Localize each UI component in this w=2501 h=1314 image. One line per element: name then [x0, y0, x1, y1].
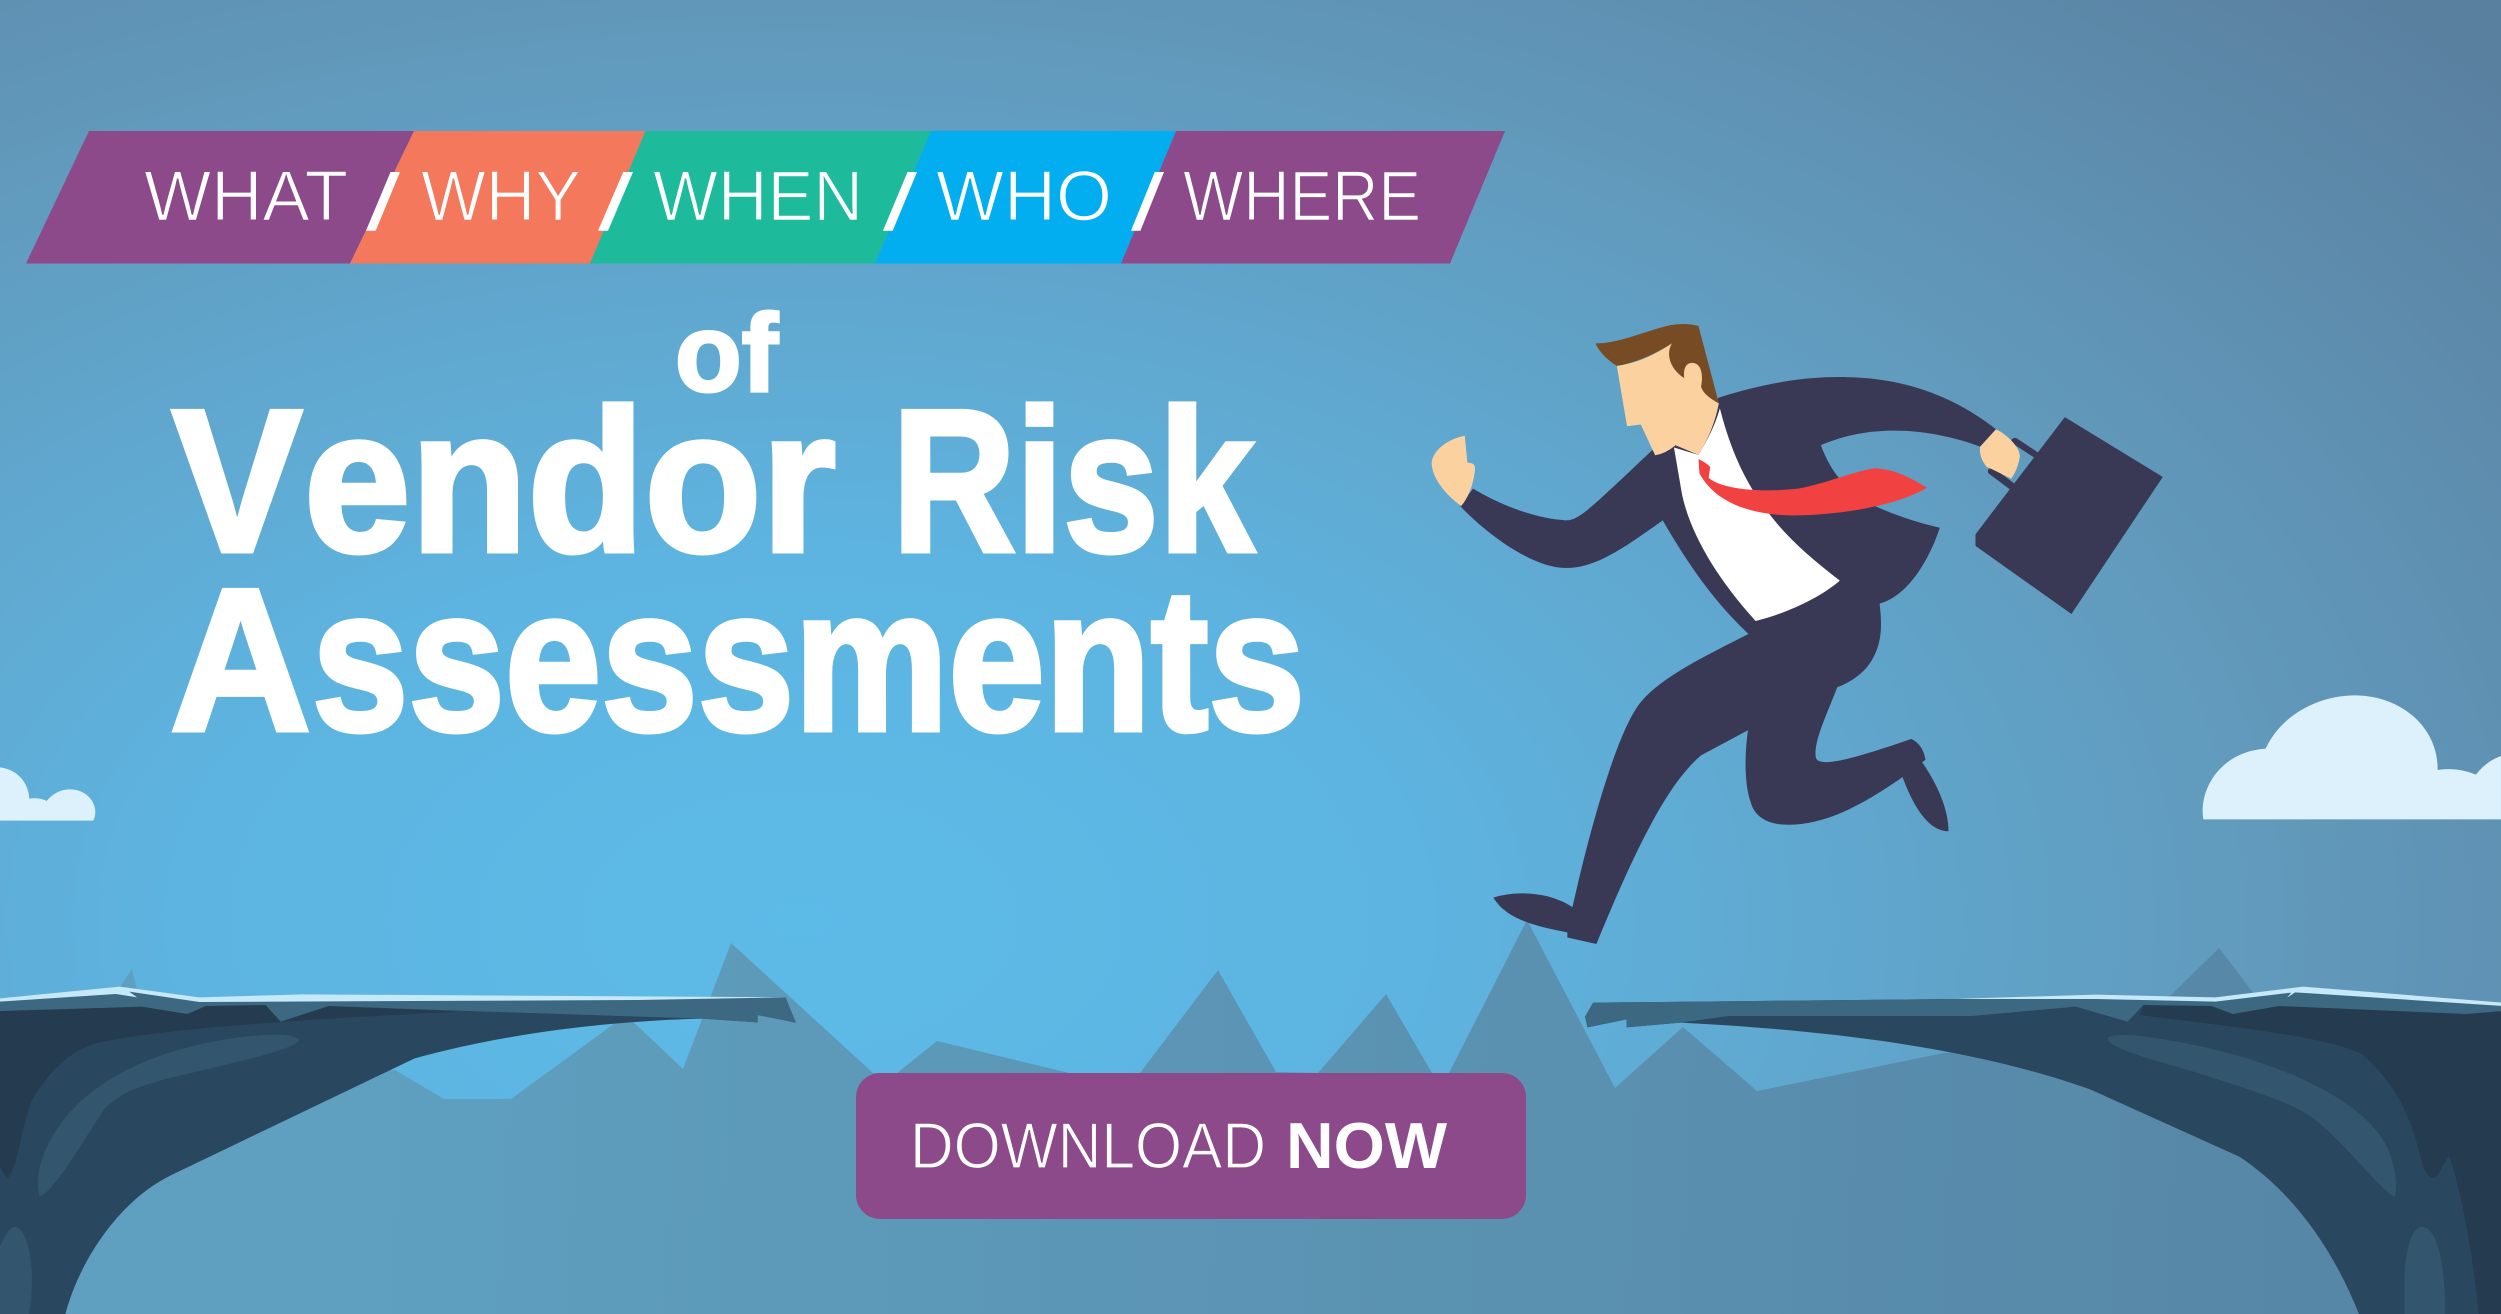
title line: assessments: ssessments	[312, 547, 1305, 774]
word: why: WHY	[421, 158, 581, 236]
slash 1: /	[366, 158, 401, 247]
band: what	[26, 131, 414, 264]
title line: vendor risk: V	[172, 368, 302, 595]
rock streak	[38, 1035, 299, 1197]
button: download now	[856, 1073, 1526, 1219]
dark shadow region	[0, 1005, 459, 1178]
cliff ledge	[0, 987, 796, 1023]
cliff ledge	[1585, 987, 2501, 1027]
slash 4: /	[1131, 158, 1165, 247]
title line: vendor risk: endor	[304, 368, 836, 595]
cliff body	[1585, 987, 2501, 1314]
band: where	[1121, 131, 1505, 264]
mountains	[0, 920, 2501, 1314]
band: why	[350, 131, 646, 264]
briefcase	[1976, 417, 2163, 614]
title	[170, 292, 1305, 774]
word: who: WHO	[936, 158, 1112, 236]
suit	[1460, 377, 1996, 944]
button label: download: DOWNLOAD	[910, 1109, 1266, 1182]
button label: now: NOW	[1286, 1109, 1448, 1182]
word: what: WHAT	[144, 158, 348, 236]
left hand	[1432, 436, 1475, 506]
title line: assessments: A	[170, 547, 311, 774]
businessman jumping	[1432, 324, 2163, 944]
cliff body	[0, 987, 796, 1314]
title line: of: of	[675, 292, 778, 415]
dark shadow region	[2140, 1005, 2501, 1314]
button shape	[856, 1073, 1526, 1219]
band: who	[875, 131, 1176, 264]
title line: vendor risk: Risk	[892, 368, 1255, 595]
rock streak	[2108, 1035, 2396, 1197]
banner	[26, 131, 1505, 264]
word: where: WHERE	[1183, 158, 1421, 236]
ice edge	[1952, 987, 2501, 1006]
left cliff	[0, 987, 796, 1314]
rock streak lower	[2404, 1227, 2445, 1314]
ice edge	[0, 987, 786, 1002]
tie	[1698, 459, 1927, 516]
rear shoe	[1903, 760, 1948, 831]
right cliff	[1585, 987, 2501, 1314]
hair	[1595, 324, 1719, 403]
slash 2: /	[598, 158, 634, 247]
word: when: WHEN	[653, 158, 863, 236]
slash 3: /	[883, 158, 918, 247]
right hand	[1980, 429, 2020, 479]
band: when	[590, 131, 931, 264]
rock streak lower	[0, 1227, 32, 1314]
shirt	[1674, 408, 1840, 621]
cloud right	[2203, 695, 2501, 819]
head	[1617, 343, 1719, 455]
cloud left	[0, 767, 95, 821]
